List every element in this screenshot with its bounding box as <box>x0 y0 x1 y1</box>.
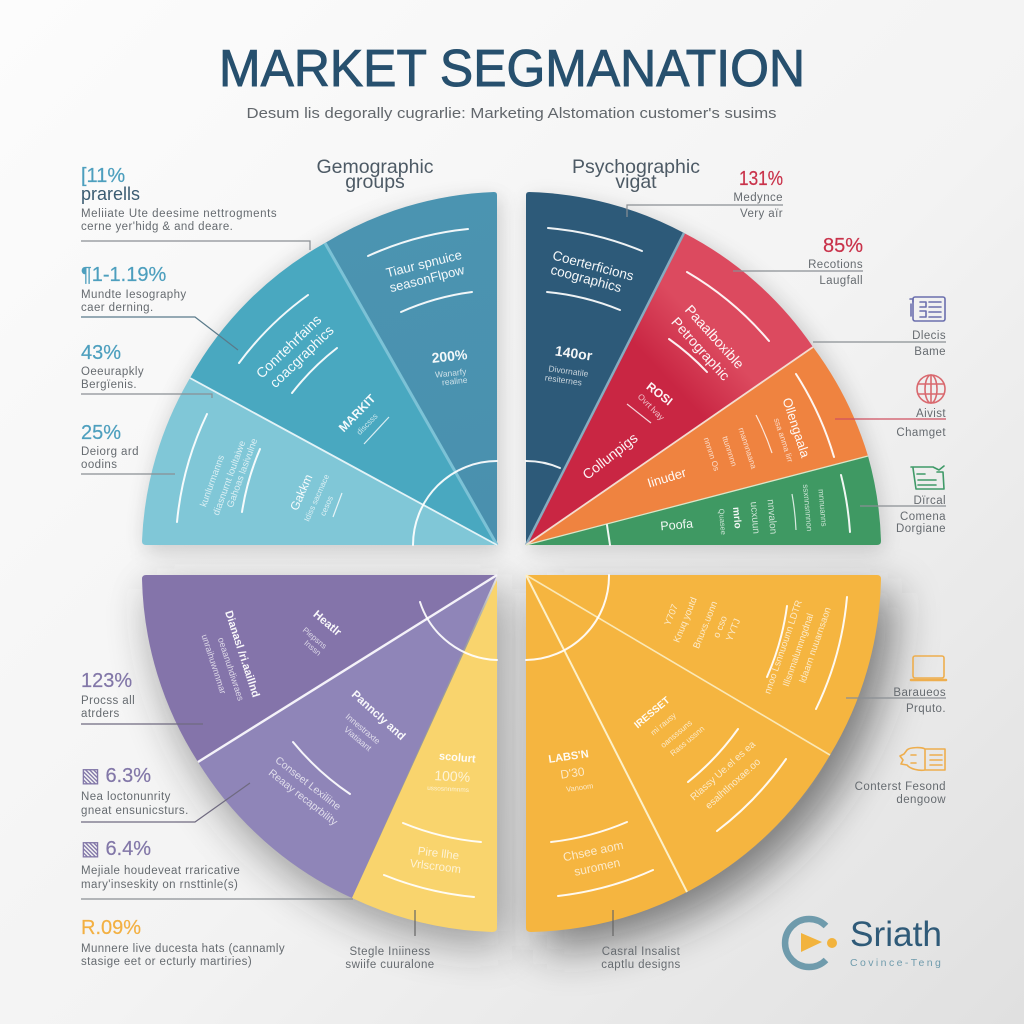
text: dark purple wedge <box>200 609 344 702</box>
left callout: 1.19% <box>81 264 238 350</box>
wedge: mid teal <box>190 243 497 545</box>
text: red wedge <box>579 272 769 482</box>
text: amber outer wedge: Knuq youtd <box>672 596 700 644</box>
right callout: baraueos <box>846 656 946 715</box>
wedge: yellow <box>352 580 497 932</box>
text: dark teal wedge: Tiaur spnuice <box>384 247 463 280</box>
wedge: dark purple <box>142 575 497 762</box>
text: amber inner wedge <box>548 748 653 896</box>
heading: demographic groups: groups <box>345 171 405 193</box>
left callout: 6.3%: gneat ensunicsturs. <box>81 805 189 817</box>
icon: book <box>900 748 945 770</box>
text: amber outer wedge: Bnuxs.uonn <box>691 600 720 650</box>
right callout: 131% <box>627 168 783 220</box>
text: red wedge: Collunpigs <box>579 430 641 482</box>
text: green wedge <box>660 475 850 535</box>
left callout: 43%: 43% <box>81 342 121 364</box>
right callout: baraueos: Prquto. <box>906 703 946 715</box>
icon: green card <box>911 466 944 489</box>
left callout: 6.4%: Mejiale houdeveat rraricative <box>81 865 240 877</box>
text: dark teal wedge <box>368 229 472 387</box>
wedge: navy <box>526 192 684 545</box>
left callout: 123% <box>81 670 203 724</box>
left callout: 25%: Deiorg ard <box>81 446 139 458</box>
text: mid teal wedge <box>239 295 389 444</box>
left callout: 43%: Bergïenis. <box>81 379 137 391</box>
text: orange wedge: nnnnn Os <box>702 436 721 472</box>
text: dark purple wedge: unraihuwnnmar <box>200 633 228 695</box>
right callout: 131%: 131% <box>739 168 783 190</box>
left callout: 6.4%: mary'inseskity on rnsttinle(s) <box>81 879 238 891</box>
subtitle: Desum lis degorally cugrarlie: Marketing Alstomation customer's susims <box>246 105 776 122</box>
right callout: content: Conterst Fesond <box>855 781 946 793</box>
text: light teal wedge: Idiss sacmace <box>302 473 331 523</box>
text: amber middle wedge: oansssuns <box>659 718 694 750</box>
panel: amber quadrant <box>526 575 881 932</box>
right callout: dircal: Dïrcal <box>913 495 946 507</box>
left callout: .09%: R.09% <box>81 917 141 939</box>
text: navy wedge: Divornatile <box>548 363 589 379</box>
right callout: dircal: Dorgiane <box>896 523 946 535</box>
text: light purple wedge: Viatiaant <box>342 724 374 754</box>
left callout: 1.19%: ¶1-1.19% <box>81 264 166 286</box>
left callout: 11% prarells: prarells <box>81 184 140 204</box>
text: orange wedge: ssa anma lirr <box>772 417 795 464</box>
left callout: 6.3% <box>81 765 250 822</box>
left callout: 43% <box>81 342 212 398</box>
text: green wedge: mnnuanns <box>816 489 829 527</box>
text: yellow wedge: Pire llhe <box>417 846 460 863</box>
right callout: 85%: 85% <box>823 235 863 257</box>
logo: Covince-Teng <box>850 957 943 969</box>
text: green wedge: nnvalon <box>764 499 778 535</box>
left callout: .09%: stasige eet or ecturly martiries) <box>81 956 252 968</box>
text: amber inner wedge: LABS'N <box>548 748 590 766</box>
text: mid teal wedge: Conrtehrfains <box>253 311 324 381</box>
title: MARKET SEGMANATION <box>219 39 805 97</box>
text: amber middle wedge: Rass ussnn <box>668 724 706 758</box>
text: red wedge: Paaalboxible <box>682 302 748 372</box>
right callout: aivist: Aivist <box>916 408 946 420</box>
left callout: 6.3%: Nea loctonunrity <box>81 791 171 803</box>
text: orange wedge: Ollengaala <box>780 396 813 460</box>
text: amber inner wedge: Vanoom <box>565 781 594 794</box>
left callout: 6.4% <box>81 838 353 899</box>
text: navy wedge <box>544 228 642 388</box>
bottom callout: casral: captlu designs <box>601 959 681 971</box>
text: yellow wedge: scolurt <box>438 750 476 766</box>
wedge: amber outer <box>526 575 881 755</box>
text: navy wedge: 140or <box>554 343 594 364</box>
text: amber middle wedge: IRESSET <box>632 695 672 731</box>
text: dark purple wedge: oeaanuhdiwraes <box>216 636 246 702</box>
text: red wedge: Petrographic <box>668 314 733 384</box>
bottom callout: casral <box>601 910 681 971</box>
text: red wedge: Ovrt lvay <box>636 391 667 423</box>
text: green wedge: ucxuun <box>748 501 761 534</box>
left callout: 25%: oodins <box>81 459 117 471</box>
text: dark purple wedge: Inssn <box>302 638 323 658</box>
bottom callout: stegle: Stegle Iniiness <box>349 946 431 958</box>
left callout: 25% <box>81 422 175 474</box>
right callout: diecis: Dlecis <box>912 330 946 342</box>
text: light purple wedge <box>266 689 407 829</box>
text: light purple wedge: Innestraxte <box>344 711 382 746</box>
wedge: amber middle <box>526 575 830 892</box>
right callout: content: dengoow <box>896 794 946 806</box>
text: dark teal wedge: realine <box>441 375 468 387</box>
text: green wedge: Poofa <box>660 517 694 533</box>
bottom callout: stegle: swiife cuuralone <box>345 959 435 971</box>
heading: psychographic <box>572 156 700 193</box>
wedge: dark teal <box>325 192 497 545</box>
text: amber outer wedge: Illsnmalunnngdnal <box>781 612 816 688</box>
panel: purple yellow quadrant <box>142 575 497 932</box>
left callout: 123%: atrders <box>81 708 120 720</box>
text: dark purple wedge: Piepsns <box>301 625 328 651</box>
right callout: 131%: Medynce <box>733 192 783 204</box>
text: mid teal wedge: discsss <box>355 412 380 437</box>
right callout: aivist <box>835 375 946 439</box>
logo: Sriath <box>850 915 942 954</box>
text: amber inner wedge: suromen <box>573 855 621 879</box>
text: mid teal wedge: coacgraphics <box>266 322 337 391</box>
left callout: 123%: 123% <box>81 670 132 692</box>
wedge: green <box>526 456 881 545</box>
left callout: 6.3%: ▧ 6.3% <box>81 765 151 787</box>
text: orange wedge: rnannnaana <box>736 427 758 470</box>
text: light teal wedge: Gahoas lasivulne <box>225 437 260 509</box>
left callout: 25%: 25% <box>81 422 121 444</box>
text: navy wedge: coographics <box>549 262 624 295</box>
text: amber outer wedge <box>662 596 847 709</box>
left callout: 11% prarells: [11% <box>81 165 125 187</box>
panel: navy red orange green quadrant <box>526 192 881 545</box>
right callout: 85% <box>733 235 863 287</box>
text: amber middle wedge: esalhtlnoxae.oo <box>704 756 763 812</box>
right callout: aivist: Chamget <box>896 427 946 439</box>
heading: psychographic: vigat <box>615 171 657 193</box>
wedge: amber inner <box>526 575 687 932</box>
right callout: diecis <box>813 297 946 358</box>
text: amber inner wedge: Chsee aom <box>562 838 625 864</box>
text: dark teal wedge: seasonFlpow <box>388 262 466 295</box>
text: green wedge: Quasee <box>717 508 728 535</box>
text: light purple wedge: Reaay recaprbility <box>266 767 340 829</box>
icon: document <box>910 297 945 321</box>
left callout: 123%: Procss all <box>81 695 135 707</box>
text: mid teal wedge: MARKIT <box>336 391 379 435</box>
icon: laptop <box>911 656 946 680</box>
wedge: light purple <box>198 575 497 898</box>
bottom callout: stegle <box>345 910 435 971</box>
logo <box>785 915 943 969</box>
text: amber outer wedge: Y707 <box>662 603 681 627</box>
left callout: 1.19%: caer derning. <box>81 302 154 314</box>
text: yellow wedge <box>384 750 481 897</box>
heading: demographic groups <box>316 156 434 193</box>
right callout: baraueos: Baraueos <box>893 687 946 699</box>
wedge: orange <box>526 347 868 545</box>
text: dark teal wedge: Wanarfy <box>435 366 468 380</box>
text: yellow wedge: ussosnnmnms <box>427 785 470 794</box>
text: light teal wedge: Gakkm <box>287 472 315 513</box>
text: light purple wedge: Conseet Lexiliine <box>273 754 343 813</box>
text: orange wedge: ttunnnnn <box>720 435 738 467</box>
left callout: 6.4%: ▧ 6.4% <box>81 838 151 860</box>
left callout: 11% prarells: cerne yer'hidg & and deare. <box>81 221 233 233</box>
right callout: 85%: Recotions <box>808 259 863 271</box>
text: light teal wedge: cesos <box>318 495 335 517</box>
text: light teal wedge: diasnurnt loultaiwe <box>211 439 248 517</box>
text: light teal wedge <box>177 414 342 523</box>
text: orange wedge: Iinuder <box>645 465 689 491</box>
panel: teal quadrant <box>142 192 497 545</box>
text: navy wedge: resiternes <box>544 372 583 388</box>
left callout: 11% prarells: Meliiate Ute deesime nettrogments <box>81 208 277 220</box>
heading: demographic groups: Gemographic <box>316 156 434 178</box>
wedge: red <box>526 233 813 545</box>
text: red wedge: ROSI <box>644 379 675 408</box>
left callout: 11% prarells <box>81 165 310 250</box>
right callout: 85%: Laugfall <box>819 275 863 287</box>
text: yellow wedge: 100% <box>434 767 471 785</box>
text: light teal wedge: kunlurmanns <box>198 453 227 509</box>
right callout: diecis: Bame <box>914 346 946 358</box>
text: amber outer wedge: ldaarn nuuarnsaon <box>798 606 834 684</box>
left callout: 1.19%: Mundte Iesography <box>81 289 187 301</box>
left callout: .09% <box>81 917 285 968</box>
text: light purple wedge: Panncly and <box>349 689 407 743</box>
text: amber outer wedge: o cso <box>711 614 730 640</box>
heading: psychographic: Psychographic <box>572 156 700 178</box>
text: amber outer wedge: YYTJ <box>724 617 743 643</box>
right callout: content <box>855 748 946 806</box>
text: amber outer wedge: nnoo Lsnnuounn LDTR <box>762 599 805 695</box>
wedge: light teal <box>142 378 497 545</box>
text: dark teal wedge: 200% <box>431 346 469 366</box>
left callout: 43%: Oeeurapkly <box>81 366 144 378</box>
text: amber middle wedge <box>632 695 786 831</box>
text: amber middle wedge: mi rausy <box>649 711 678 737</box>
text: dark purple wedge: Dianasl /ri.aaillnd <box>222 609 262 699</box>
text: green wedge: mrlo <box>730 507 743 529</box>
text: amber middle wedge: Rlassy Ue.el es ea <box>689 739 758 803</box>
bottom callout: casral: Casral Insalist <box>602 946 681 958</box>
text: green wedge: ssxnnsnnnon <box>801 484 814 532</box>
text: navy wedge: Coerterficions <box>551 248 636 284</box>
text: orange wedge <box>645 374 834 491</box>
left callout: .09%: Munnere live ducesta hats (cannamly <box>81 943 285 955</box>
right callout: dircal: Comena <box>900 511 946 523</box>
text: dark purple wedge: Heatlr <box>311 609 344 639</box>
right callout: 131%: Very aïr <box>740 208 783 220</box>
right callout: dircal <box>860 466 946 535</box>
icon: globe <box>917 375 945 403</box>
text: amber inner wedge: D'30 <box>559 764 586 782</box>
text: yellow wedge: Vrlscroom <box>409 858 462 876</box>
